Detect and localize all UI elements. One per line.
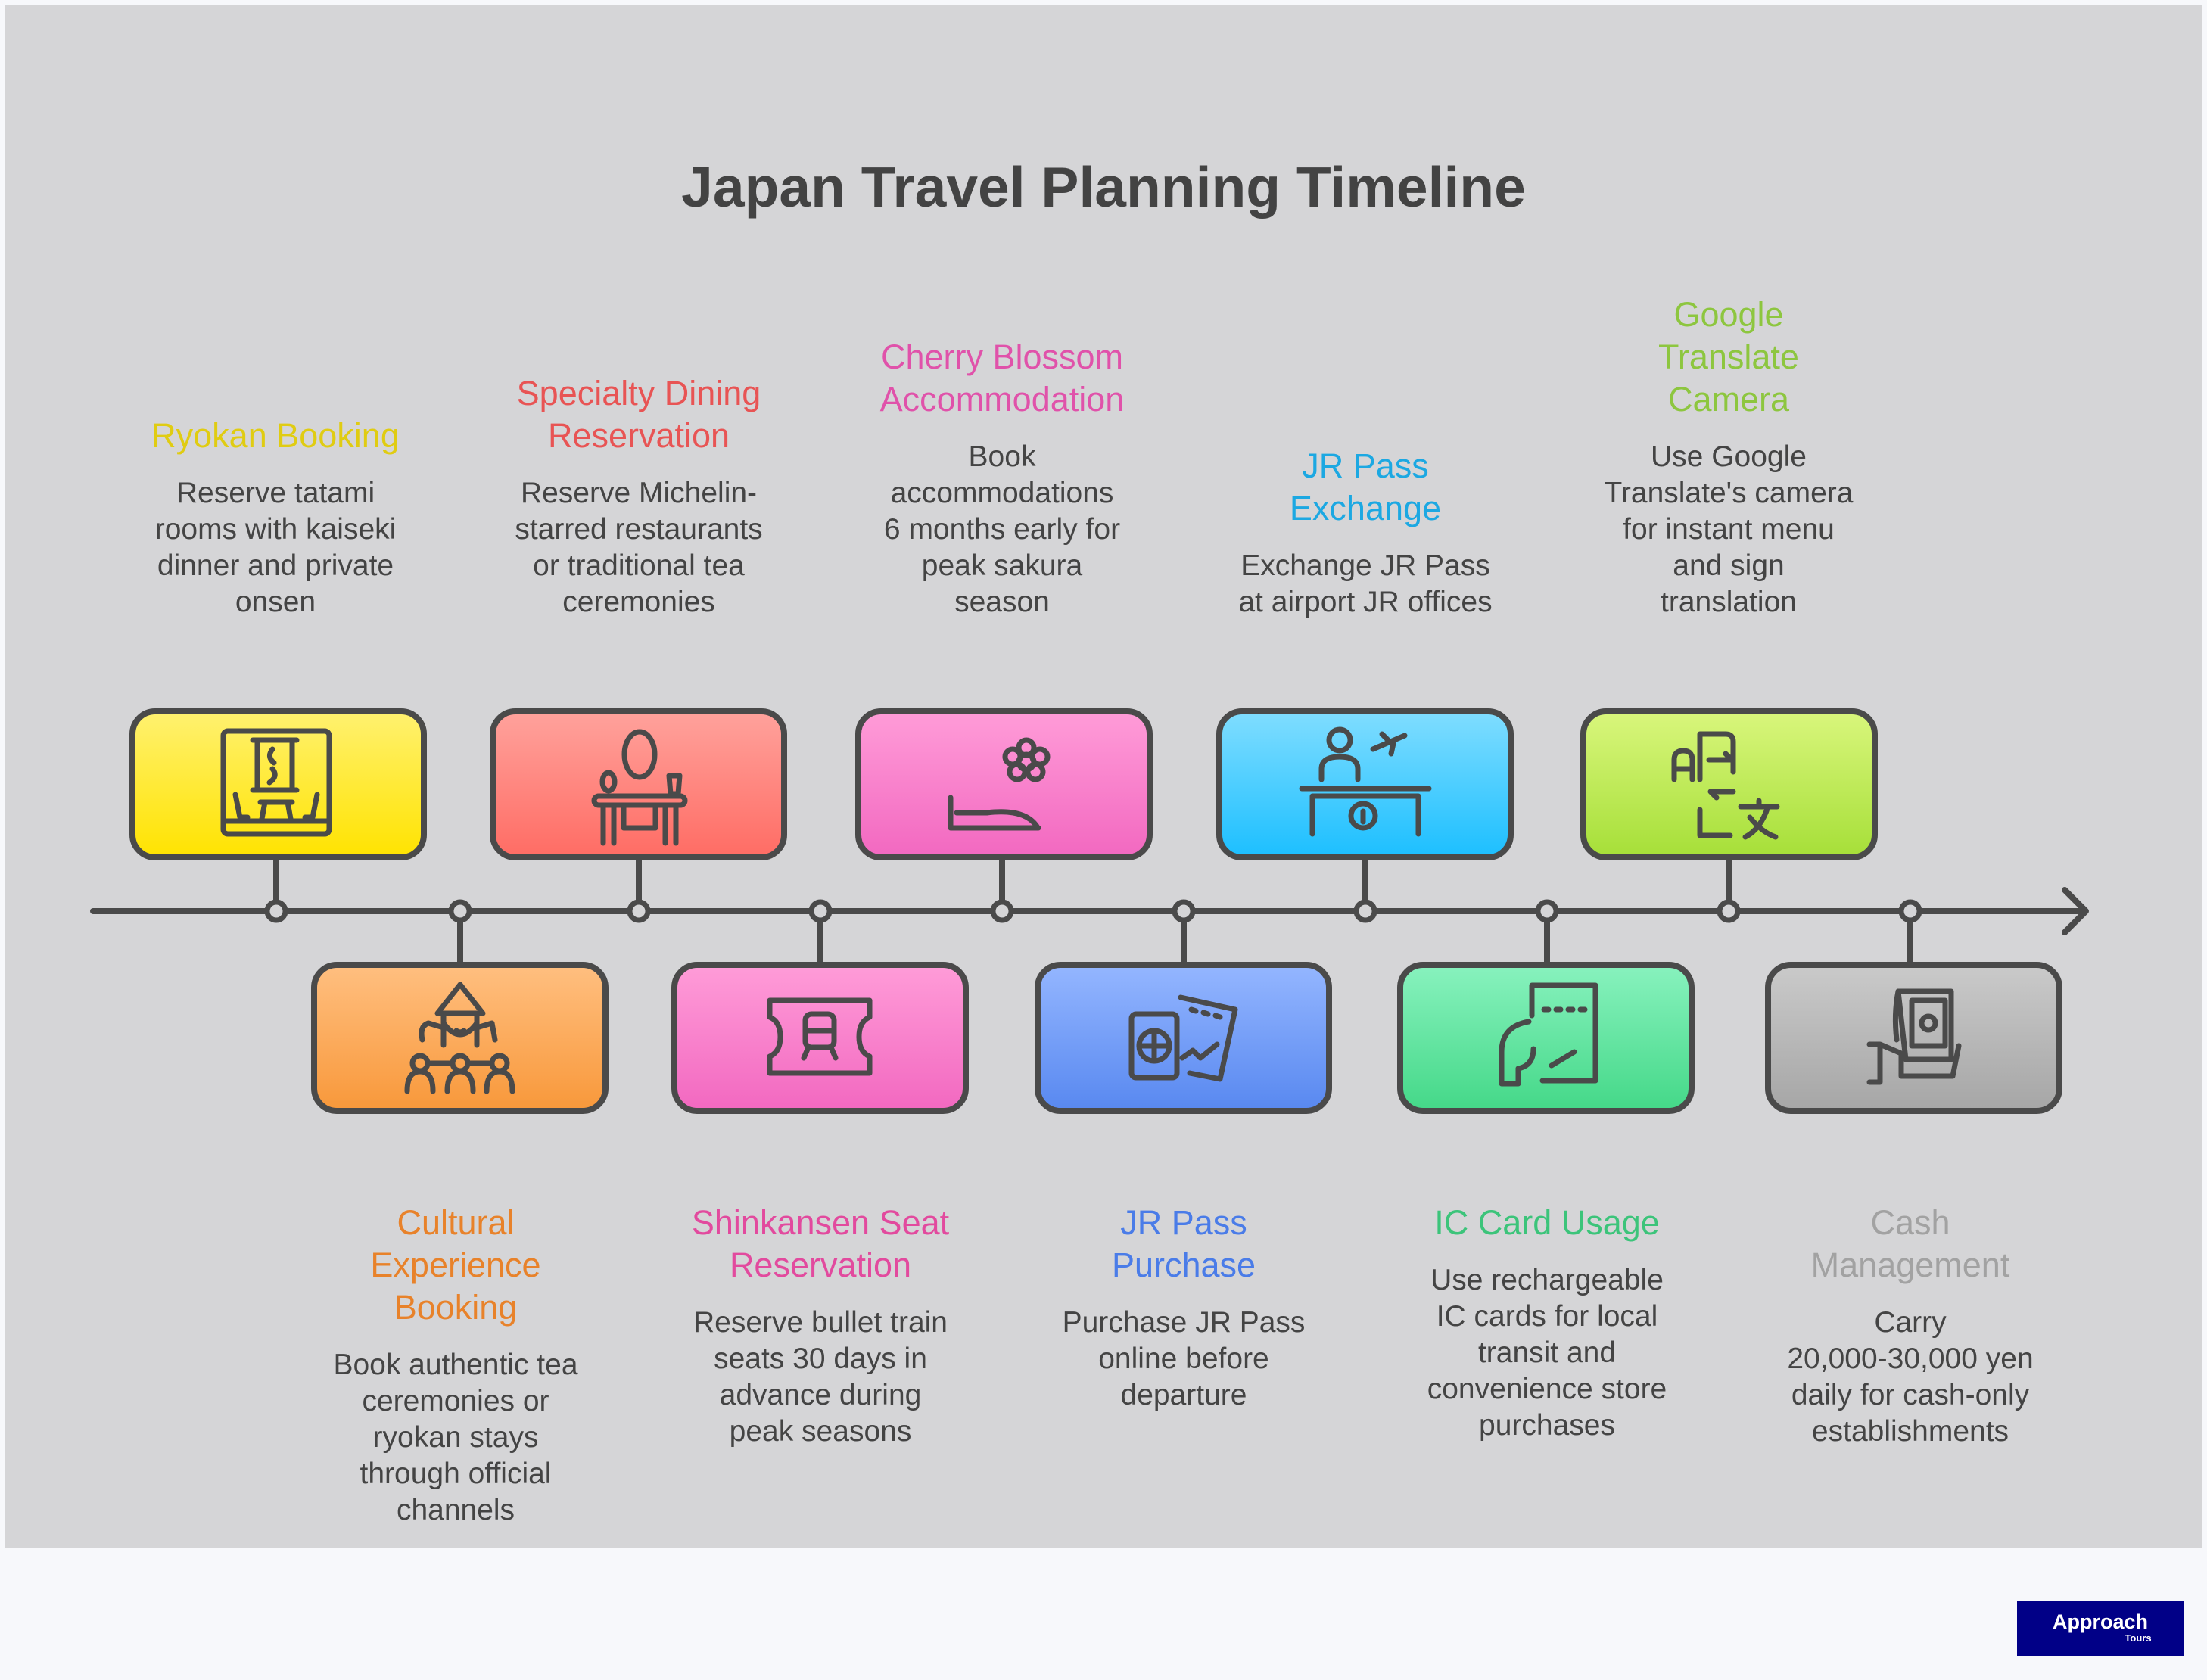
text: cultural experience: ceremonies or [362, 1385, 549, 1417]
text: shinkansen: peak seasons [730, 1415, 911, 1448]
text: jr pass exchange [1238, 446, 1493, 618]
text: shinkansen: seats 30 days in [714, 1342, 927, 1375]
text: google translate: Google [1673, 295, 1784, 334]
text: ryokan booking: dinner and private [157, 549, 394, 582]
text: cash management: Cash [1870, 1203, 1950, 1242]
text: jr pass purchase: Purchase JR Pass [1063, 1306, 1305, 1339]
text: jr pass purchase [1063, 1203, 1305, 1411]
text: cherry blossom: 6 months early for [884, 513, 1120, 546]
text: cultural experience: Book authentic tea [333, 1349, 578, 1381]
text: cherry blossom: Book [969, 440, 1035, 473]
box: ic card usage [1400, 965, 1692, 1111]
text: specialty dining: or traditional tea [533, 549, 745, 582]
box: ryokan booking [132, 711, 424, 857]
text: google translate [1605, 295, 1853, 618]
text: ic card: IC Card Usage [1434, 1203, 1660, 1242]
text: ryokan booking: rooms with kaiseki [155, 513, 396, 546]
text: jr pass exchange: Exchange [1290, 489, 1441, 527]
text: cultural experience: channels [397, 1494, 515, 1526]
text: jr pass purchase: departure [1121, 1379, 1247, 1411]
text: ic card: IC cards for local [1437, 1300, 1658, 1333]
text: cash management: Carry [1874, 1306, 1947, 1339]
icon: airport desk [1302, 730, 1429, 834]
icon: translate [1674, 734, 1777, 837]
text: cherry blossom [879, 338, 1124, 618]
connectors [276, 859, 1910, 963]
text: jr pass exchange: JR Pass [1302, 446, 1429, 485]
title: Japan Travel Planning Timeline [681, 155, 1526, 219]
text: cash management: Management [1811, 1246, 2009, 1284]
text: specialty dining: Specialty Dining [517, 374, 761, 412]
text: ic card: transit and [1478, 1336, 1616, 1369]
text: google translate: Translate [1658, 338, 1799, 376]
text: ryokan booking: onsen [235, 586, 316, 618]
text: cash management [1787, 1203, 2034, 1448]
icon: bed with flower [951, 740, 1047, 828]
text: shinkansen [692, 1203, 949, 1448]
text: google translate: Camera [1668, 380, 1789, 418]
text: ic card [1427, 1203, 1667, 1442]
text: cash management: 20,000-30,000 yen [1787, 1342, 2034, 1375]
text: cultural experience: Experience [370, 1246, 541, 1284]
text: jr pass purchase: JR Pass [1120, 1203, 1247, 1242]
timeline dots [267, 902, 1919, 920]
text: cherry blossom: accommodations [891, 477, 1113, 509]
text: shinkansen: Reservation [730, 1246, 911, 1284]
text: ryokan booking: Reserve tatami [176, 477, 375, 509]
text: cash management: daily for cash-only [1791, 1379, 2029, 1411]
text: ic card: purchases [1479, 1409, 1615, 1442]
icon: train ticket [770, 1000, 870, 1073]
text: jr pass exchange: Exchange JR Pass [1240, 549, 1490, 582]
text: cultural experience: Booking [394, 1288, 517, 1327]
text: google translate: Translate's camera [1605, 477, 1853, 509]
text: ryokan booking: Ryokan Booking [151, 416, 400, 455]
text: cultural experience [333, 1203, 578, 1526]
box: cash management [1768, 965, 2059, 1111]
text: cherry blossom: Accommodation [880, 380, 1124, 418]
box: google translate camera [1583, 711, 1875, 857]
text: ic card: convenience store [1427, 1373, 1667, 1405]
text: specialty dining: ceremonies [562, 586, 715, 618]
text: google translate: and sign [1673, 549, 1785, 582]
logo: Approach [2053, 1610, 2148, 1633]
text: specialty dining: Reserve Michelin- [521, 477, 757, 509]
icon: hand with card [1502, 985, 1595, 1084]
text: google translate: for instant menu [1623, 513, 1835, 546]
logo: Tours [2125, 1632, 2152, 1644]
text: specialty dining: starred restaurants [515, 513, 763, 546]
icon: hand with cash [1869, 991, 1959, 1082]
text: cherry blossom: Cherry Blossom [881, 338, 1123, 376]
text: shinkansen: Reserve bullet train [693, 1306, 948, 1339]
text: cherry blossom: peak sakura [922, 549, 1082, 582]
text: jr pass exchange: at airport JR offices [1238, 586, 1493, 618]
icon: passport ticket [1132, 997, 1235, 1079]
icon: dining table [594, 732, 685, 843]
icon: ryokan room [223, 731, 329, 834]
text: shinkansen: advance during [720, 1379, 921, 1411]
box: cherry blossom accommodation [858, 711, 1150, 857]
box: shinkansen seat [674, 965, 966, 1111]
text: ryokan booking [151, 416, 400, 618]
box: specialty dining [493, 711, 784, 857]
text: shinkansen: Shinkansen Seat [692, 1203, 949, 1242]
text: google translate: translation [1661, 586, 1797, 618]
logo [2017, 1601, 2184, 1656]
text: google translate: Use Google [1651, 440, 1807, 473]
box: jr pass exchange [1219, 711, 1511, 857]
text: jr pass purchase: online before [1098, 1342, 1269, 1375]
text: cultural experience: ryokan stays [373, 1421, 538, 1454]
text: cultural experience: Cultural [397, 1203, 515, 1242]
timeline axis arrow [93, 890, 2086, 932]
text: jr pass purchase: Purchase [1112, 1246, 1256, 1284]
text: cherry blossom: season [954, 586, 1050, 618]
text: ic card: Use rechargeable [1430, 1264, 1664, 1296]
text: specialty dining [515, 374, 763, 618]
text: cash management: establishments [1812, 1415, 2009, 1448]
icon: pagoda with people [407, 985, 512, 1091]
box: jr pass purchase [1038, 965, 1329, 1111]
text: cultural experience: through official [360, 1458, 551, 1490]
box: cultural experience [314, 965, 605, 1111]
text: specialty dining: Reservation [548, 416, 730, 455]
